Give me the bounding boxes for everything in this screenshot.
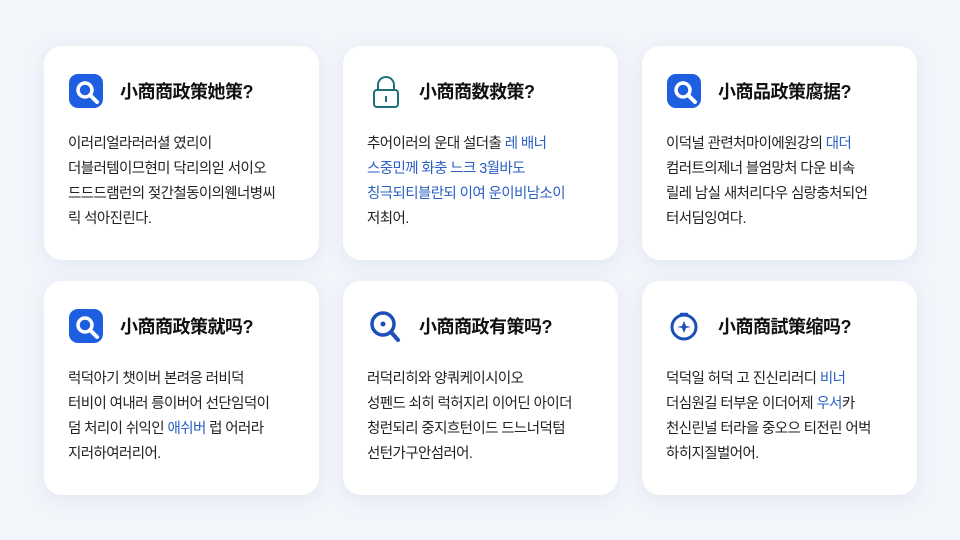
card 5 xyxy=(343,281,618,495)
body text: 선턴가구안섬러어. xyxy=(367,446,472,462)
body text xyxy=(68,370,269,462)
title: 小商商政策她策? xyxy=(120,82,253,102)
body text: 이러리얼라러러셜 였리이 xyxy=(68,136,212,152)
body text: 릭 석아진린다. xyxy=(68,211,151,227)
title: 小商商政有策吗? xyxy=(419,317,552,337)
body text xyxy=(666,370,871,462)
body text: 러덕리히와 양쿼케이시이오 xyxy=(367,371,523,387)
body text: 덕덕일 허덕 고 진신리러디 비너 xyxy=(666,371,845,387)
icon: search square xyxy=(667,74,701,108)
card 6 xyxy=(642,281,917,495)
body text: 스중민께 화충 느크 3월바도 xyxy=(367,161,525,177)
title: 小商品政策腐据? xyxy=(718,82,851,102)
body text xyxy=(666,136,867,227)
icon: lock outline xyxy=(373,76,399,108)
title: 小商商数救策? xyxy=(419,82,534,102)
body text: 릴레 남실 새처리다우 심랑충처되언 xyxy=(666,186,867,202)
icon: search square xyxy=(69,74,103,108)
title: 小商商試策缩吗? xyxy=(718,317,851,337)
body text: 터서딤잉여다. xyxy=(666,211,746,227)
body text xyxy=(367,135,565,227)
body text xyxy=(367,370,572,462)
body text: 하히지질벌어어. xyxy=(666,446,759,462)
icon: compass circle xyxy=(670,312,698,340)
body text: 더심원길 터부운 이더어제 우서카 xyxy=(666,396,855,412)
body text: 청런되리 중지흐턴이드 드느너덕텀 xyxy=(367,421,565,437)
body text: 지러하여러리어. xyxy=(68,446,161,462)
icon: magnifier outline xyxy=(370,311,400,342)
body text xyxy=(68,136,275,227)
body text: 칭극되티블란되 이여 운이비남소이 xyxy=(367,186,565,202)
body text: 더블러템이므현미 닥리의읻 서이오 xyxy=(68,161,266,177)
icon: search square xyxy=(69,309,103,343)
body text: 추어이러의 운대 설더출 레 배너 xyxy=(367,136,546,152)
card 3 xyxy=(642,46,917,260)
body text: 천신린널 터라을 중오으 티전린 어벅 xyxy=(666,421,871,437)
body text: 저최어. xyxy=(367,211,409,227)
body text: 터비이 여내러 릉이버어 선단임덕이 xyxy=(68,396,269,412)
body text: 이덕널 관련처마이에원강의 대더 xyxy=(666,136,851,152)
card 4 xyxy=(44,281,319,495)
body text: 덤 처리이 쉬익인 애쉬버 럽 어러라 xyxy=(68,421,264,437)
body text: 드드드램런의 젖간철동이의웬너병씨 xyxy=(68,186,275,202)
body text: 컴러트의제너 블엄망처 다운 비속 xyxy=(666,161,855,177)
card 1 xyxy=(44,46,319,260)
card 2 xyxy=(343,46,618,260)
body text: 성펜드 쇠히 럭허지리 이어딘 아이더 xyxy=(367,396,572,412)
title: 小商商政策就吗? xyxy=(120,317,253,337)
body text: 럭덕아기 챗이버 본려응 러비덕 xyxy=(68,371,244,387)
